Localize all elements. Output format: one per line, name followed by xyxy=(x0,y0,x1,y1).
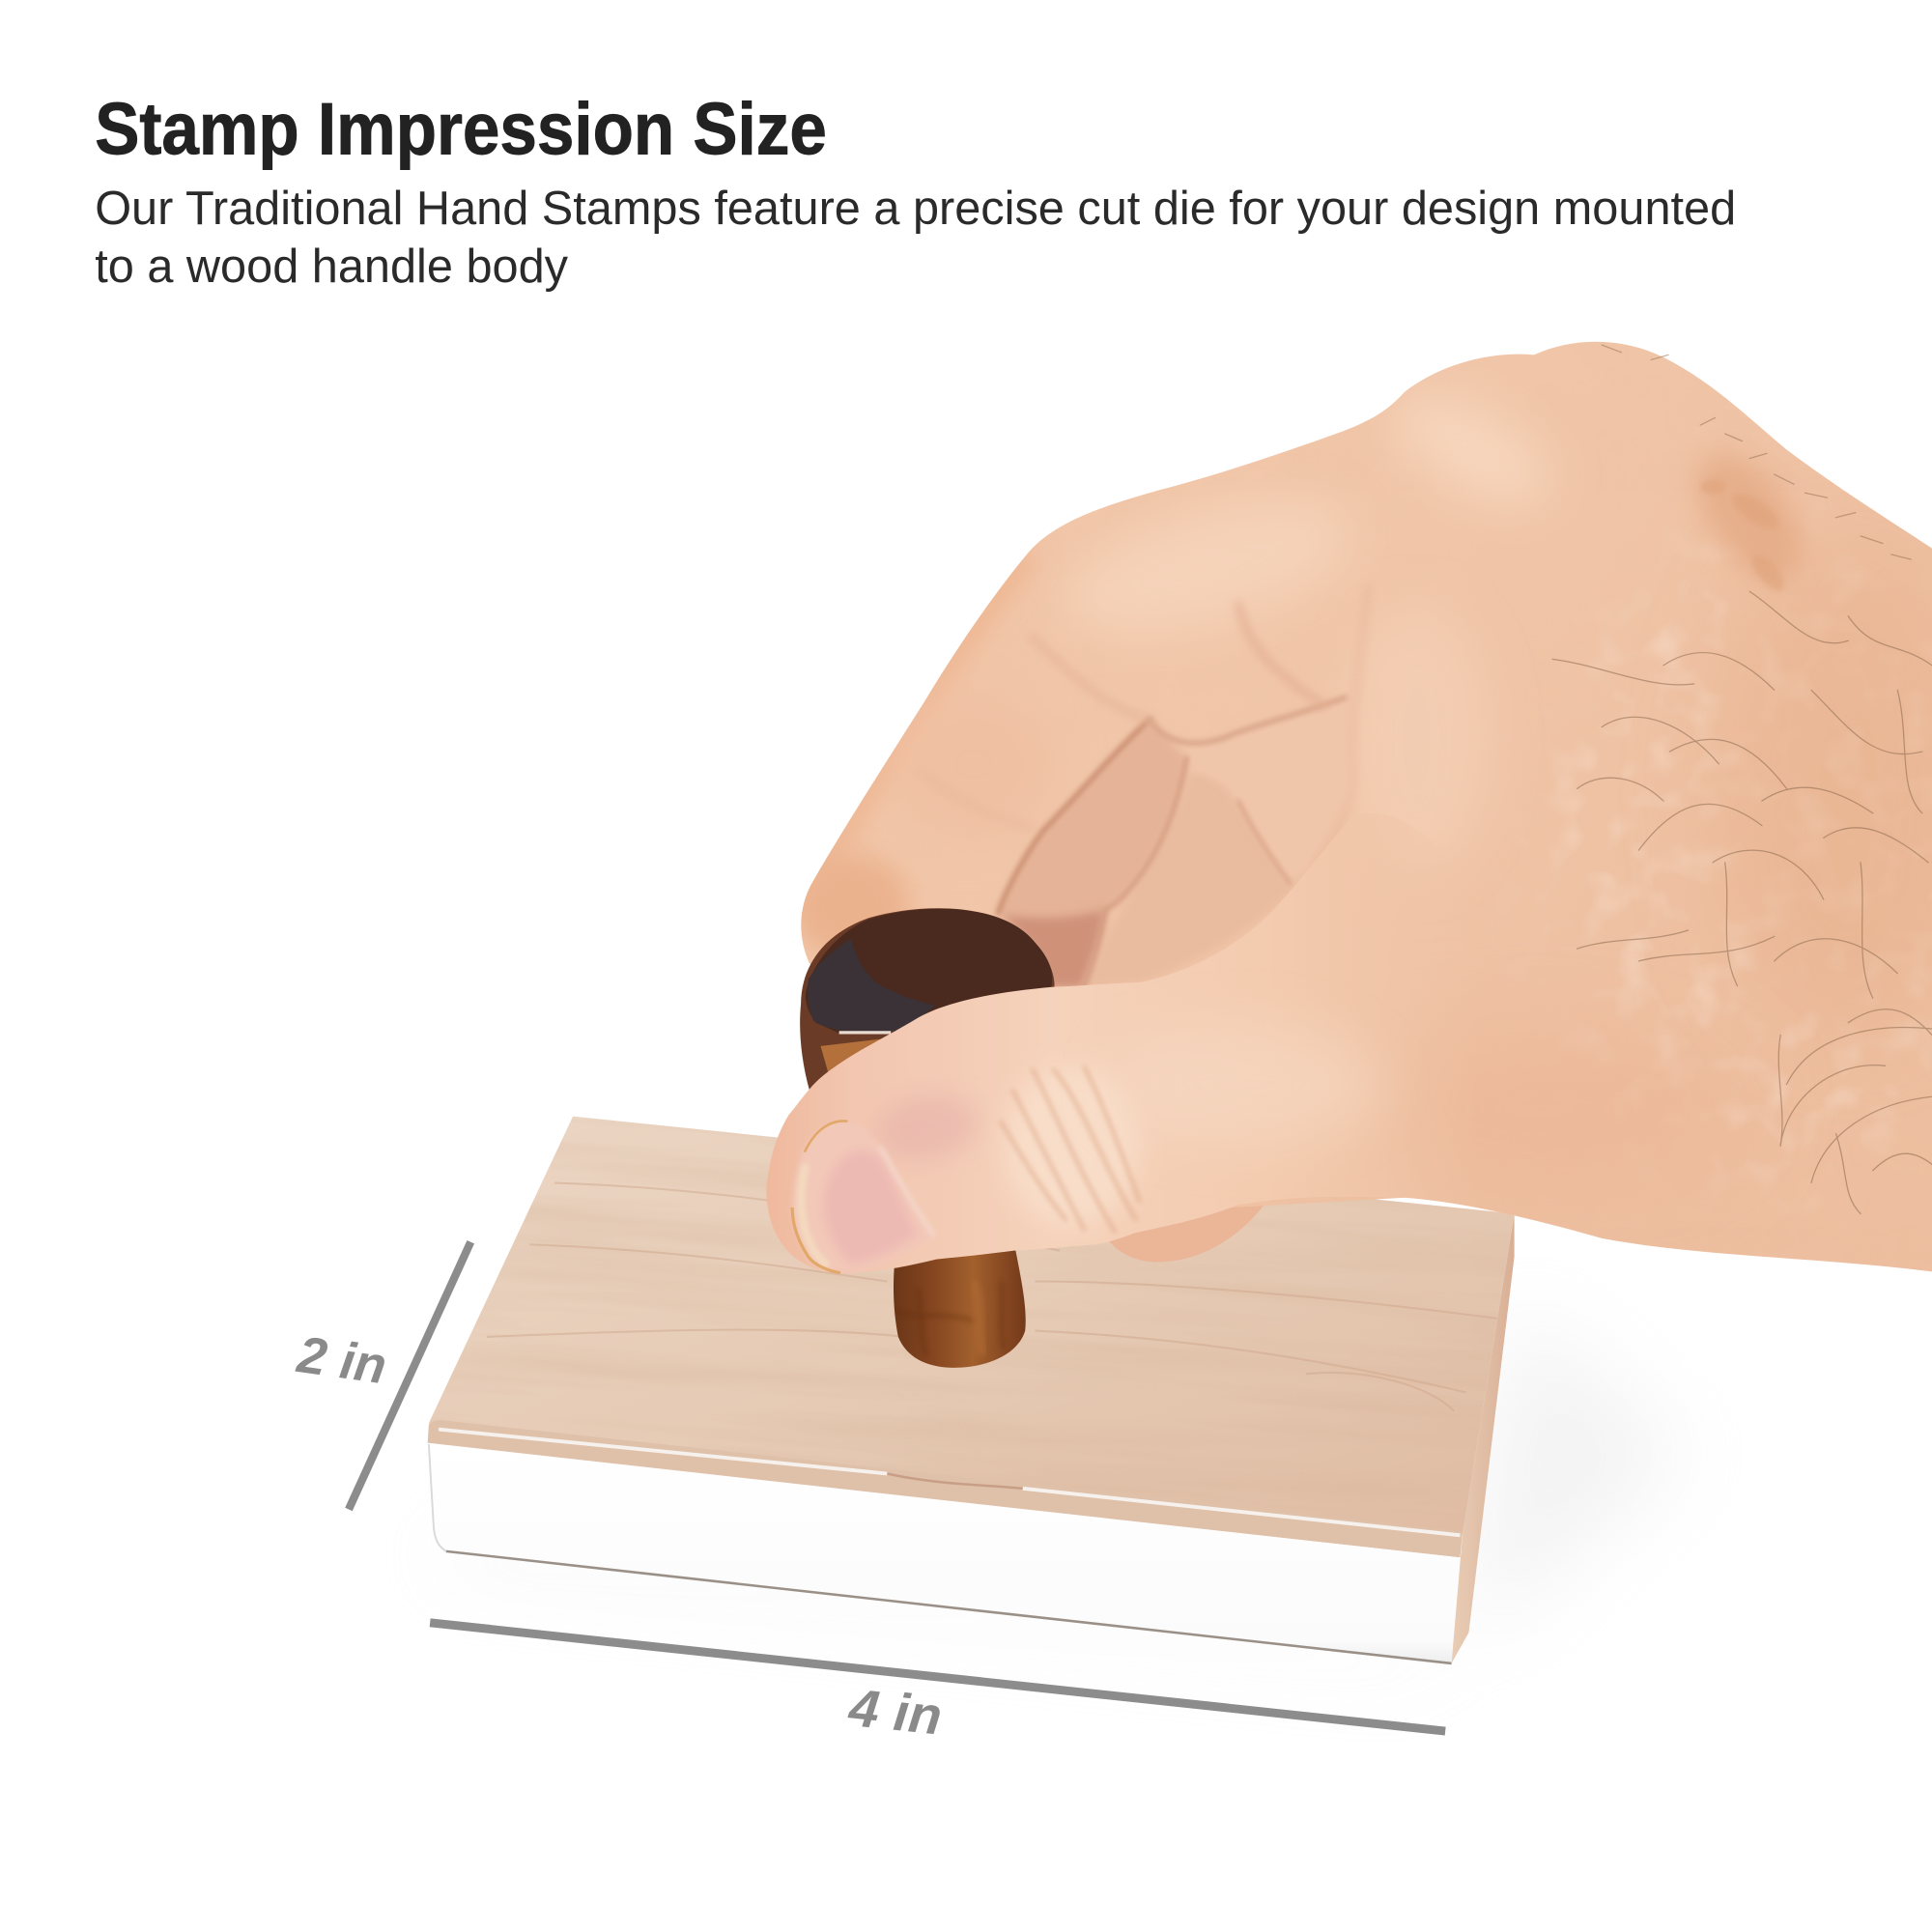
knuckle highlights xyxy=(1399,392,1549,508)
subtitle text block: Our Traditional Hand Stamps feature a precise cut die for your design mounted xyxy=(95,183,1736,235)
thumb nail xyxy=(792,1121,934,1273)
palm fold xyxy=(1190,696,1350,884)
ring finger xyxy=(1096,777,1287,983)
wooden stamp block xyxy=(427,1117,1515,1665)
thumb xyxy=(766,813,1491,1273)
subtitle text block: to a wood handle body xyxy=(95,241,568,293)
curled middle finger xyxy=(998,720,1186,917)
arm hair and freckles xyxy=(1552,591,1932,1213)
clear wrap lip xyxy=(428,1420,1463,1557)
exposed orange wood xyxy=(820,1038,884,1072)
subtitle text block xyxy=(95,183,1736,293)
stamp handle lower section xyxy=(894,1242,1026,1368)
block right side xyxy=(1452,1213,1515,1663)
curled fingertip shadow xyxy=(998,908,1105,988)
title: Stamp Impression Size xyxy=(95,88,827,170)
middle fingertip under thumb xyxy=(1103,1202,1266,1263)
cast shadow of block xyxy=(431,1306,1688,1678)
knuckle wrinkles xyxy=(1001,1067,1140,1233)
dimension line: 4 in xyxy=(430,1623,1445,1747)
label: 4 in: 4 in xyxy=(845,1677,945,1747)
dimension line: 2 in xyxy=(293,1242,470,1509)
crease shading xyxy=(918,585,1368,985)
warm tone at wrist side xyxy=(1713,542,1932,1035)
thumb joint highlight and pink shading xyxy=(870,1087,983,1168)
index finger warm rim xyxy=(813,552,1029,881)
gray glare on knob xyxy=(808,939,935,1032)
block top face xyxy=(429,1117,1515,1534)
stamp knob xyxy=(800,908,1055,1096)
label: 2 in: 2 in xyxy=(293,1326,390,1395)
white impression face xyxy=(428,1443,1459,1663)
hand back and fingers xyxy=(801,342,1932,1271)
